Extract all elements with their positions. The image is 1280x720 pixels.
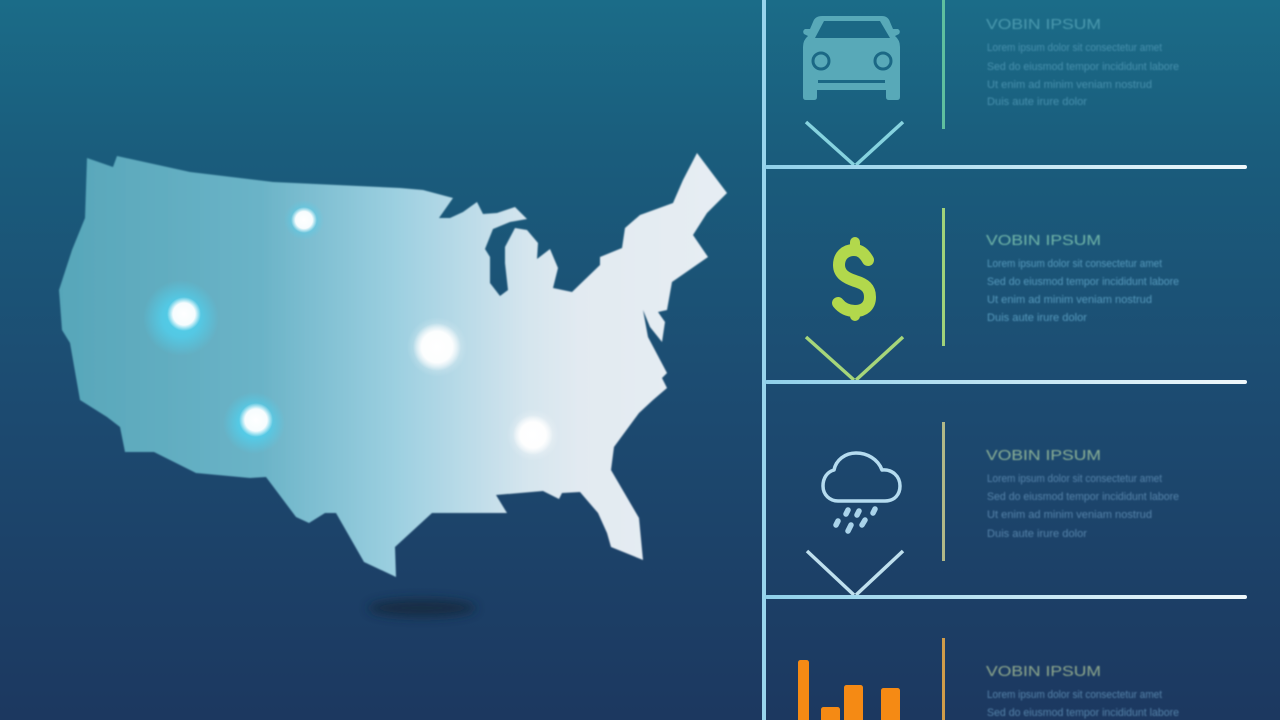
map shadow (368, 599, 476, 617)
text block: VOBIN IPSUM (986, 663, 1101, 680)
chevron (806, 122, 903, 165)
baseline (765, 380, 1247, 384)
icon: car (803, 16, 900, 100)
text block (986, 232, 1179, 324)
divider (942, 638, 945, 720)
panel: dollar (765, 208, 1247, 384)
text block: Duis aute irure dolor (987, 528, 1087, 540)
text block (986, 663, 1179, 719)
text block: Ut enim ad minim veniam nostrud (987, 509, 1152, 521)
text block: Sed do eiusmod tempor incididunt labore (987, 491, 1179, 503)
text block: Lorem ipsum dolor sit consectetur amet (987, 473, 1162, 485)
vertical timeline axis (762, 0, 766, 720)
glow point: north (284, 200, 324, 240)
text block (986, 447, 1179, 540)
text block: Lorem ipsum dolor sit consectetur amet (987, 258, 1162, 270)
glow point: west (143, 280, 219, 356)
text block: Sed do eiusmod tempor incididunt labore (987, 276, 1179, 288)
text block: Duis aute irure dolor (987, 96, 1087, 108)
divider (942, 0, 945, 129)
text block: Sed do eiusmod tempor incididunt labore (987, 61, 1179, 73)
panel: rain (765, 422, 1247, 599)
text block: Duis aute irure dolor (987, 312, 1087, 324)
chevron (807, 551, 903, 595)
text block (986, 16, 1179, 108)
panel: car (765, 0, 1247, 169)
text block: Lorem ipsum dolor sit consectetur amet (987, 689, 1162, 701)
baseline (765, 165, 1247, 169)
panel: bar chart (798, 638, 1179, 720)
icon: bar chart (798, 660, 900, 720)
text block: Lorem ipsum dolor sit consectetur amet (987, 42, 1162, 54)
divider (942, 422, 945, 561)
glow point: southeast (507, 409, 559, 461)
text block: VOBIN IPSUM (986, 232, 1101, 249)
icon: rain cloud (823, 453, 900, 531)
text block: VOBIN IPSUM (986, 16, 1101, 33)
text block: Ut enim ad minim veniam nostrud (987, 79, 1152, 91)
icon: dollar sign (838, 242, 870, 316)
text block: Ut enim ad minim veniam nostrud (987, 294, 1152, 306)
chevron (806, 337, 903, 380)
text block: VOBIN IPSUM (986, 447, 1101, 464)
divider (942, 208, 945, 346)
map of the United States with glowing points (59, 153, 727, 577)
map silhouette (59, 153, 727, 577)
glow point: southwest (223, 392, 285, 454)
text block: Sed do eiusmod tempor incididunt labore (987, 707, 1179, 719)
baseline (765, 595, 1247, 599)
glow point: center (407, 317, 467, 377)
